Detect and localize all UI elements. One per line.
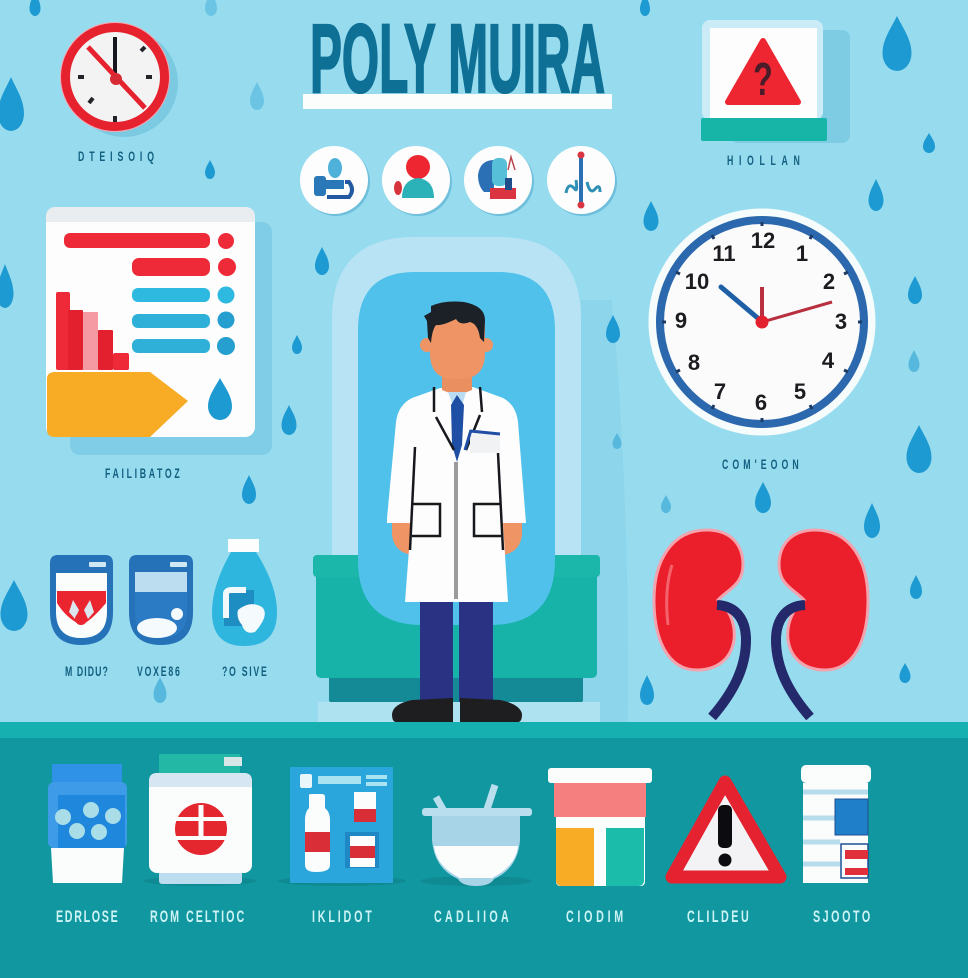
clock numerals: 10	[685, 269, 709, 294]
clock ticks	[662, 222, 862, 422]
doctor figure	[387, 302, 526, 722]
labels: product row: ROM CELTIOC	[150, 907, 244, 926]
labels: product row: IKLIDOT	[312, 907, 372, 926]
icon: warning card	[701, 20, 850, 143]
product: blister panel	[278, 767, 406, 886]
icon row: four round symptom icons	[300, 146, 617, 216]
neck and head	[420, 302, 493, 396]
hands	[392, 520, 522, 555]
label: top left clock: DTEISOIQ	[78, 150, 154, 165]
labels: three bags	[65, 665, 267, 680]
clock numerals: 7	[714, 379, 726, 404]
wall clock	[648, 208, 876, 436]
product: urine test cup	[548, 768, 652, 886]
label: chart card: FAILIBATOZ	[105, 467, 180, 482]
icon: breathing mask	[300, 146, 370, 216]
icon: water drop	[208, 378, 232, 420]
doctor in capsule with bed	[313, 237, 628, 722]
clock numerals	[675, 228, 847, 415]
title	[303, 4, 612, 113]
icon: patient	[382, 146, 452, 216]
labels: product row: EDRLOSE	[56, 907, 118, 926]
shirt and tie	[448, 392, 466, 462]
icon: urine bag blue	[129, 555, 193, 645]
clock numerals: 2	[823, 269, 835, 294]
clock numerals: 6	[755, 390, 767, 415]
clock numerals: 3	[835, 309, 847, 334]
product: medicine box	[144, 754, 256, 886]
icon: warning triangle	[672, 782, 780, 877]
labels: product row: CADLIIOA	[434, 907, 509, 926]
icon: urine bag red	[50, 555, 113, 645]
clock hands	[721, 287, 832, 328]
labels: three bags: M DIDU?	[65, 665, 108, 680]
panel: chart card	[46, 207, 272, 455]
clock numerals: 11	[712, 241, 736, 266]
icon: warning card: ?	[753, 54, 773, 105]
right kidney	[776, 530, 868, 717]
labels: three bags: ?O SIVE	[222, 665, 267, 680]
stethoscope and coat lines	[410, 387, 503, 550]
bar chart	[56, 292, 129, 370]
water drops beside capsule	[606, 315, 622, 449]
clock numerals: 4	[822, 348, 835, 373]
title: POLY MUIRA	[310, 4, 605, 113]
labels: product row	[56, 907, 870, 926]
icon: crossed-out clock	[60, 22, 178, 137]
chest pocket	[465, 430, 500, 453]
coat	[387, 387, 526, 602]
shoes	[392, 698, 522, 722]
icon: vessels	[547, 146, 617, 216]
icon: lungs and inhaler	[464, 146, 534, 216]
icon: water bottle	[212, 539, 277, 646]
labels: product row: SJOOTO	[813, 907, 870, 926]
labels: three bags: VOXE86	[137, 665, 180, 680]
zipper	[454, 462, 458, 599]
water drops	[0, 0, 935, 705]
clock numerals: 12	[751, 228, 775, 253]
product: blue pill jar	[48, 764, 127, 883]
kidneys	[654, 530, 868, 717]
orange arrow tag	[47, 372, 188, 437]
product: labelled bottle	[801, 765, 871, 883]
trousers	[420, 600, 493, 702]
labels: product row: CLILDEU	[687, 907, 749, 926]
product: mixing bowl	[420, 785, 532, 886]
inner capsule	[358, 272, 555, 625]
bed	[313, 555, 600, 702]
labels: product row: CIODIM	[566, 907, 623, 926]
clock numerals: 1	[796, 241, 808, 266]
backdrop capsule	[318, 237, 628, 722]
bottom band	[0, 722, 968, 978]
label: warning card: HIOLLAN	[727, 154, 800, 169]
label: wall clock: COM'EOON	[722, 458, 799, 473]
clock numerals: 5	[794, 379, 806, 404]
clock numerals: 8	[688, 350, 700, 375]
left kidney	[654, 530, 746, 717]
list bars	[64, 233, 236, 355]
clock numerals: 9	[675, 308, 687, 333]
